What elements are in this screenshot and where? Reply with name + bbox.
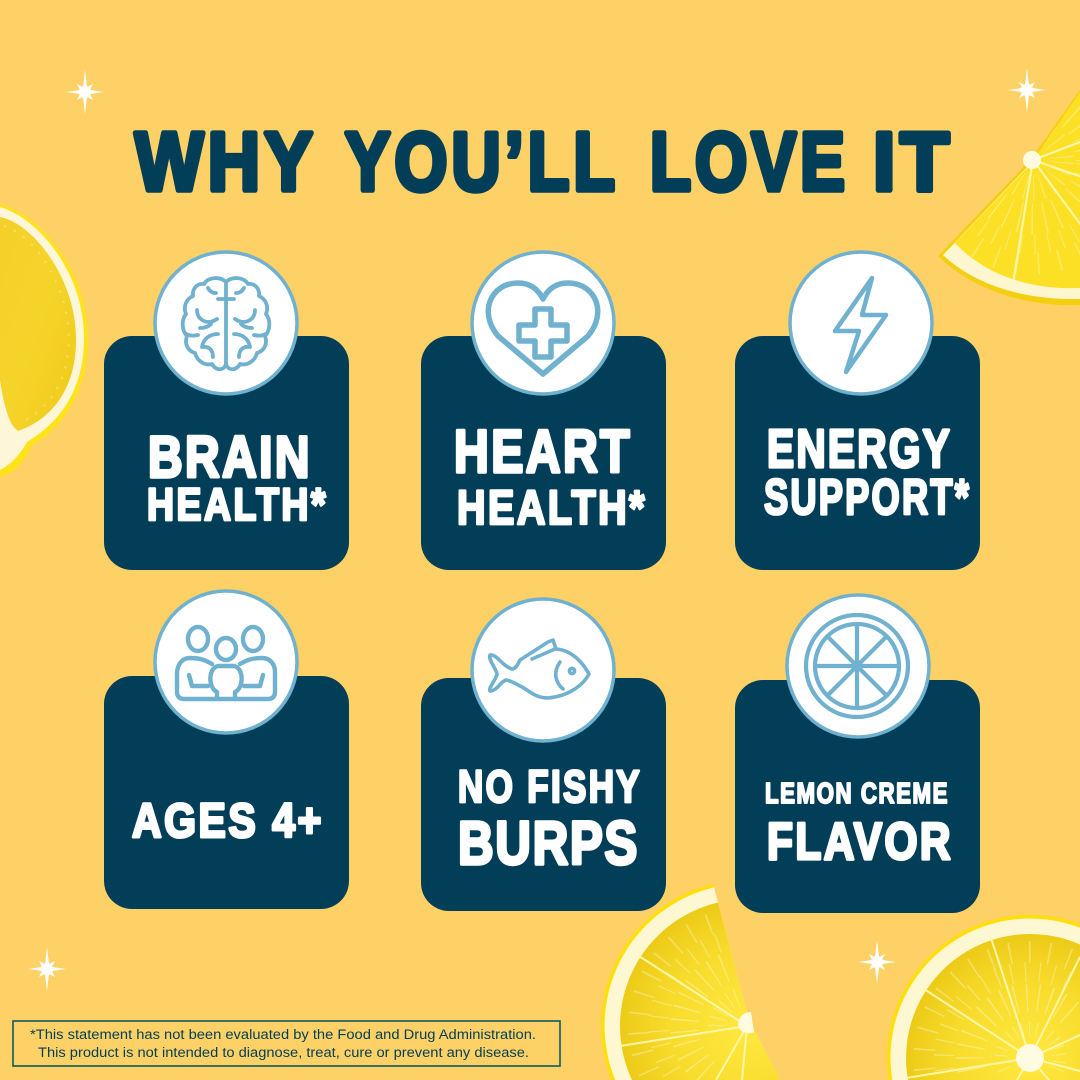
label: brain health: HEALTH* xyxy=(147,479,328,530)
sparkle: lower left xyxy=(28,947,66,991)
label: no fishy burps: BURPS xyxy=(458,809,639,877)
label: lemon creme flavor: LEMON CREME xyxy=(765,778,949,810)
icon: family xyxy=(177,627,275,699)
disclaimer box: This product is not intended to diagnose, treat, cure or prevent any disease. xyxy=(38,1045,529,1060)
panel: no fishy burps xyxy=(421,599,666,911)
lemon wedge: top right xyxy=(938,90,1080,306)
title: LOVE xyxy=(650,115,849,208)
label: no fishy burps: NO FISHY xyxy=(458,761,642,812)
label: energy support: ENERGY xyxy=(767,419,952,479)
sparkle: lower right xyxy=(858,940,896,984)
label: heart health: HEALTH* xyxy=(457,482,647,535)
label: brain health: BRAIN xyxy=(148,425,312,490)
label: lemon creme flavor xyxy=(765,778,953,871)
panel: energy support xyxy=(735,252,980,570)
label: heart health xyxy=(454,418,647,535)
label: heart health: HEART xyxy=(454,418,632,485)
label: energy support: SUPPORT* xyxy=(764,469,971,525)
label: ages 4+: AGES 4+ xyxy=(132,795,324,848)
panel: ages 4+ xyxy=(104,591,349,909)
lemon slice: bottom right xyxy=(887,915,1080,1080)
title: WHY xyxy=(135,115,317,208)
title xyxy=(135,115,954,208)
disclaimer box xyxy=(13,1021,560,1066)
label: no fishy burps xyxy=(458,761,642,877)
sparkle: top right xyxy=(1008,68,1046,112)
panel: brain health xyxy=(104,252,349,570)
sparkle: top left xyxy=(66,70,104,114)
label: energy support xyxy=(764,419,971,525)
label: lemon creme flavor: FLAVOR xyxy=(767,813,953,871)
label: brain health xyxy=(147,425,328,530)
title: IT xyxy=(873,115,954,208)
lemon slice: left edge xyxy=(0,204,88,477)
icon: heart with cross xyxy=(488,283,598,374)
lemon wedge: bottom center xyxy=(601,884,780,1080)
title: YOU’LL xyxy=(345,115,619,208)
icon: brain xyxy=(183,278,269,369)
icon: fish xyxy=(490,640,589,698)
icon: lightning bolt xyxy=(835,278,886,372)
disclaimer box: *This statement has not been evaluated by the Food and Drug Administration. xyxy=(30,1027,536,1042)
panel: lemon creme flavor xyxy=(735,595,980,913)
icon: citrus slice xyxy=(806,615,908,717)
panel: heart health xyxy=(421,252,666,570)
